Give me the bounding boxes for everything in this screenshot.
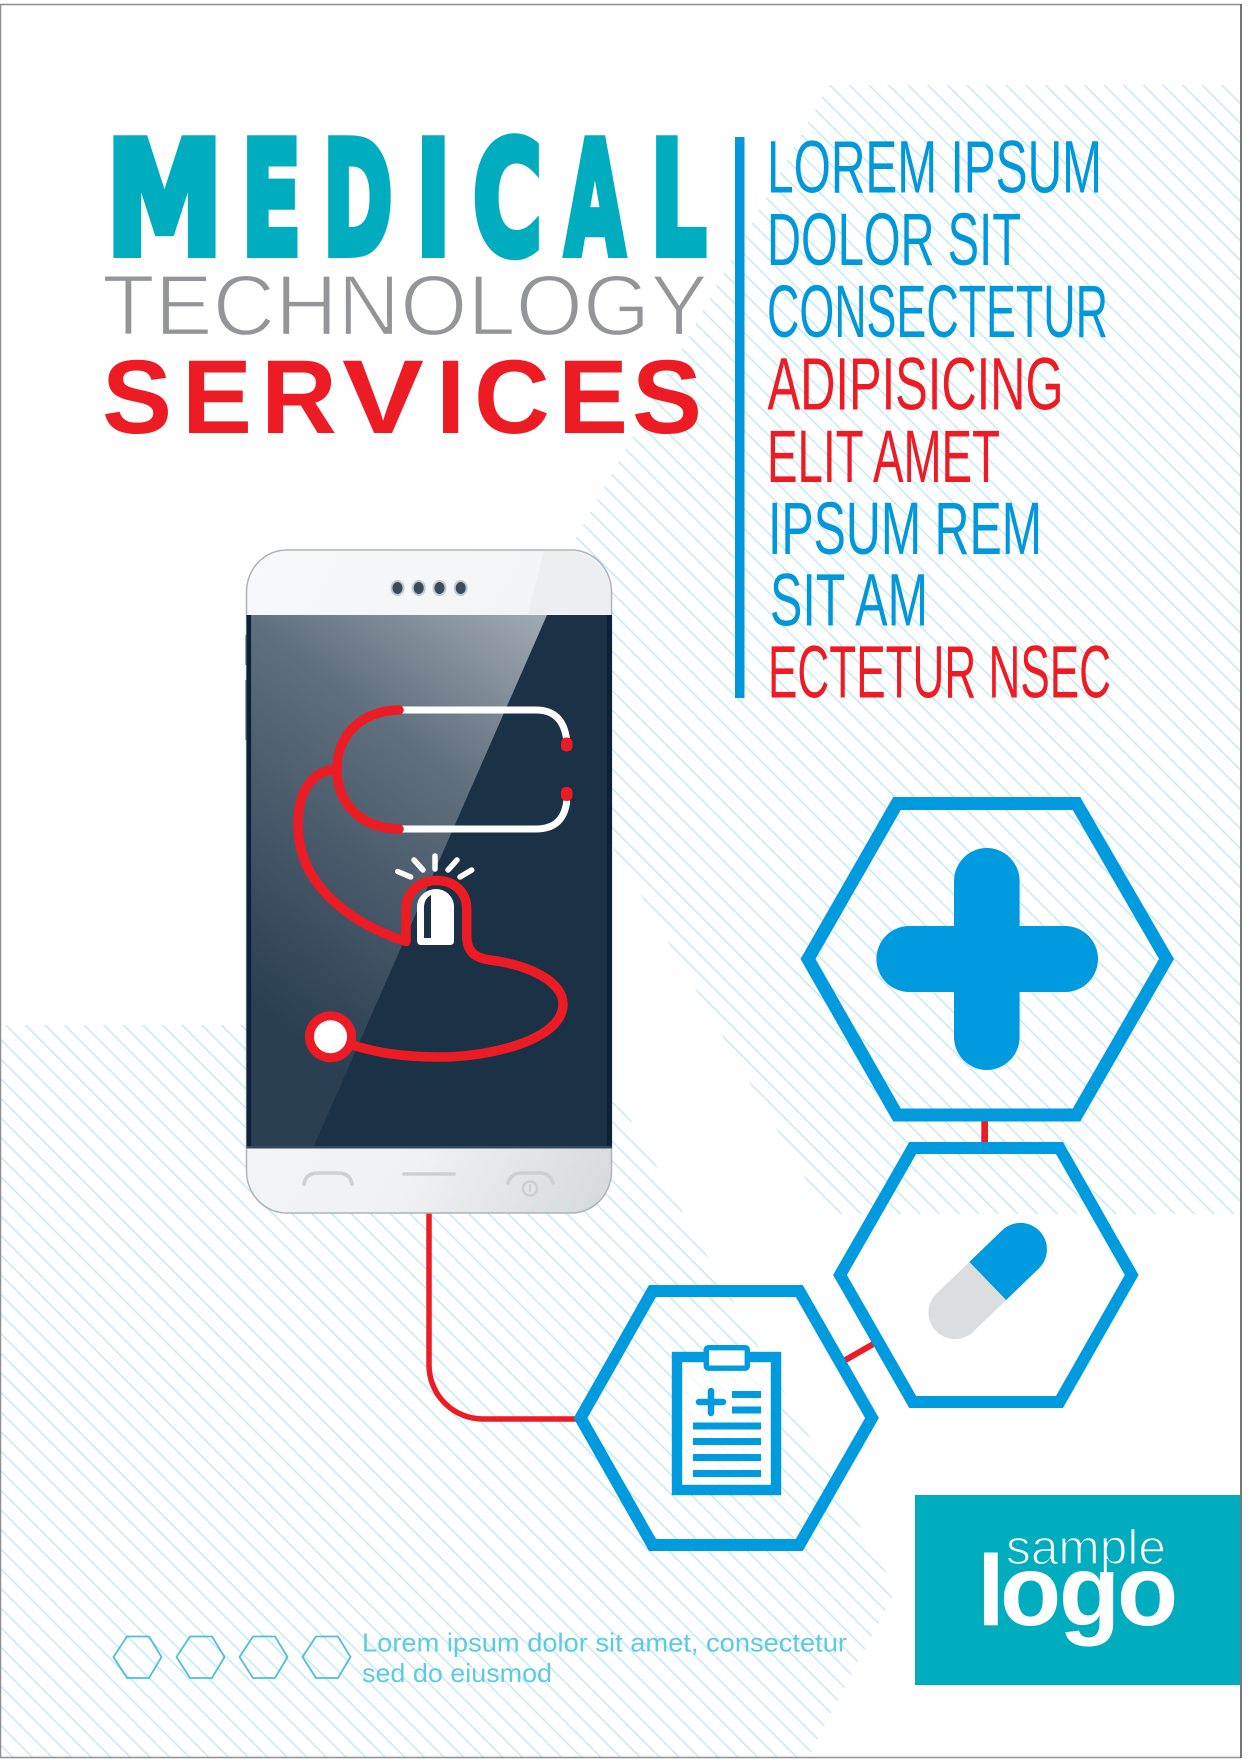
- phone top bezel highlight: [528, 551, 610, 614]
- title line: MEDICAL: C: [473, 108, 542, 290]
- red connector between cross and pill hexagons: [981, 1120, 988, 1144]
- stethoscope red headset arc: [337, 710, 399, 829]
- list of lorem ipsum lines: ADIPISICING: [768, 342, 1064, 426]
- stethoscope tube: [298, 769, 563, 1057]
- hexagon: capsule: [840, 1148, 1132, 1402]
- title line: MEDICAL: E: [242, 108, 301, 290]
- smartphone: [246, 550, 612, 1213]
- title line: SERVICES: E: [182, 339, 252, 456]
- phone screen: [246, 615, 612, 1148]
- title: [102, 108, 708, 456]
- logo word: sample: sample: [1006, 1521, 1166, 1575]
- stethoscope white ear tubes: [400, 710, 567, 740]
- title line: SERVICES: V: [342, 339, 424, 456]
- speaker dots: [392, 581, 467, 595]
- icon: clipboard: [677, 1348, 776, 1490]
- title line: MEDICAL: L: [651, 108, 706, 290]
- phone body: [246, 550, 612, 1213]
- title line: SERVICES: C: [474, 339, 550, 456]
- footer text: Lorem ipsum dolor sit amet, consectetur: [362, 1628, 847, 1658]
- title line: MEDICAL: M: [106, 108, 223, 290]
- title line: SERVICES: R: [261, 339, 337, 456]
- title line: SERVICES: E: [558, 339, 628, 456]
- vertical divider bar: [735, 137, 744, 698]
- stethoscope ear tips: [561, 738, 572, 752]
- logo block: [915, 1495, 1240, 1685]
- stethoscope: [298, 710, 572, 1058]
- list of lorem ipsum lines: IPSUM REM: [768, 487, 1042, 570]
- phone hardware buttons: [304, 1173, 553, 1196]
- striped hexagon background: bottom left: [0, 1025, 896, 1757]
- stethoscope chest piece: [310, 1016, 352, 1058]
- title line: TECHNOLOGY: TECHNOLOGY: [102, 258, 708, 354]
- title line: MEDICAL: D: [323, 108, 393, 290]
- list of lorem ipsum lines: [767, 126, 1111, 714]
- title line: SERVICES: I: [436, 339, 465, 456]
- list of lorem ipsum lines: ELIT AMET: [767, 415, 1000, 498]
- page border right: [1240, 4, 1242, 1758]
- red connector between pill and clipboard hexagons: [844, 1344, 873, 1361]
- icon: capsule pill: [917, 1212, 1058, 1350]
- red wire from phone to clipboard hexagon: [429, 1210, 576, 1419]
- list of lorem ipsum lines: SIT AM: [770, 558, 928, 642]
- finger icon with alert rays: [398, 856, 472, 945]
- footer hexagon row: [114, 1636, 350, 1678]
- title line: MEDICAL: A: [565, 108, 625, 290]
- striped hexagon background: top right: [505, 85, 1240, 1214]
- hexagon: medical cross: [808, 804, 1166, 1115]
- hexagon: clipboard: [580, 1291, 872, 1545]
- screen reflection: [251, 615, 547, 1148]
- logo word: logo: logo: [977, 1535, 1178, 1647]
- icon: cross: [876, 848, 1098, 1070]
- footer text: [362, 1628, 847, 1688]
- list of lorem ipsum lines: DOLOR SIT: [767, 198, 1021, 281]
- title line: SERVICES: S: [632, 339, 702, 456]
- title line: SERVICES: S: [102, 339, 172, 456]
- footer text: sed do eiusmod: [362, 1658, 552, 1688]
- side buttons: [245, 635, 247, 740]
- title line: MEDICAL: I: [416, 108, 450, 290]
